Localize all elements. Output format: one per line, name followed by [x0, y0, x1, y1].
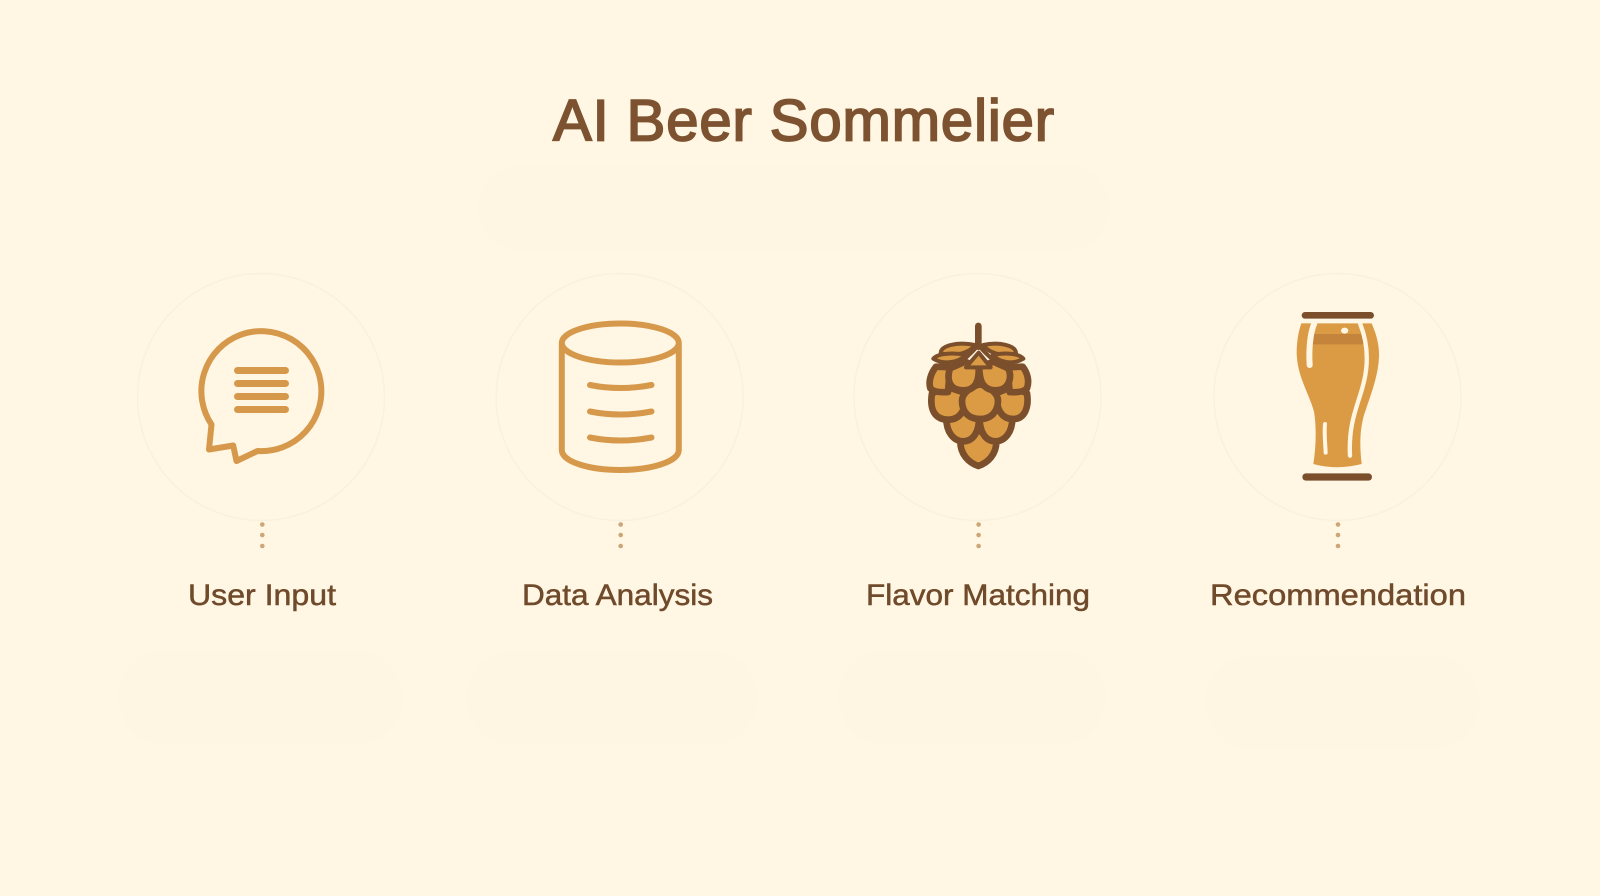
icon: beer glass	[1297, 312, 1379, 481]
connector dots	[976, 522, 981, 548]
icon circle: data analysis	[496, 274, 743, 520]
icon: speech bubble	[201, 331, 321, 461]
panel: data analysis step	[496, 274, 743, 612]
connector dots	[260, 522, 265, 548]
icon circle: user input	[138, 274, 384, 520]
panel: user input step	[138, 274, 384, 612]
label: flavor matching: Flavor Matching	[866, 579, 1090, 612]
label: data analysis: Data Analysis	[522, 579, 713, 612]
panel: flavor matching step	[854, 274, 1101, 612]
panel: recommendation step	[1210, 274, 1466, 612]
label: recommendation: Recommendation	[1210, 579, 1466, 612]
connector dots	[618, 522, 623, 548]
title: AI Beer Sommelier	[553, 88, 1055, 154]
connector dots	[1336, 522, 1340, 548]
icon circle: flavor matching	[854, 274, 1101, 520]
icon circle: recommendation	[1214, 274, 1461, 520]
icon: hop cone	[930, 326, 1028, 466]
icon: database cylinder	[562, 324, 679, 470]
label: user input: User Input	[188, 579, 337, 612]
